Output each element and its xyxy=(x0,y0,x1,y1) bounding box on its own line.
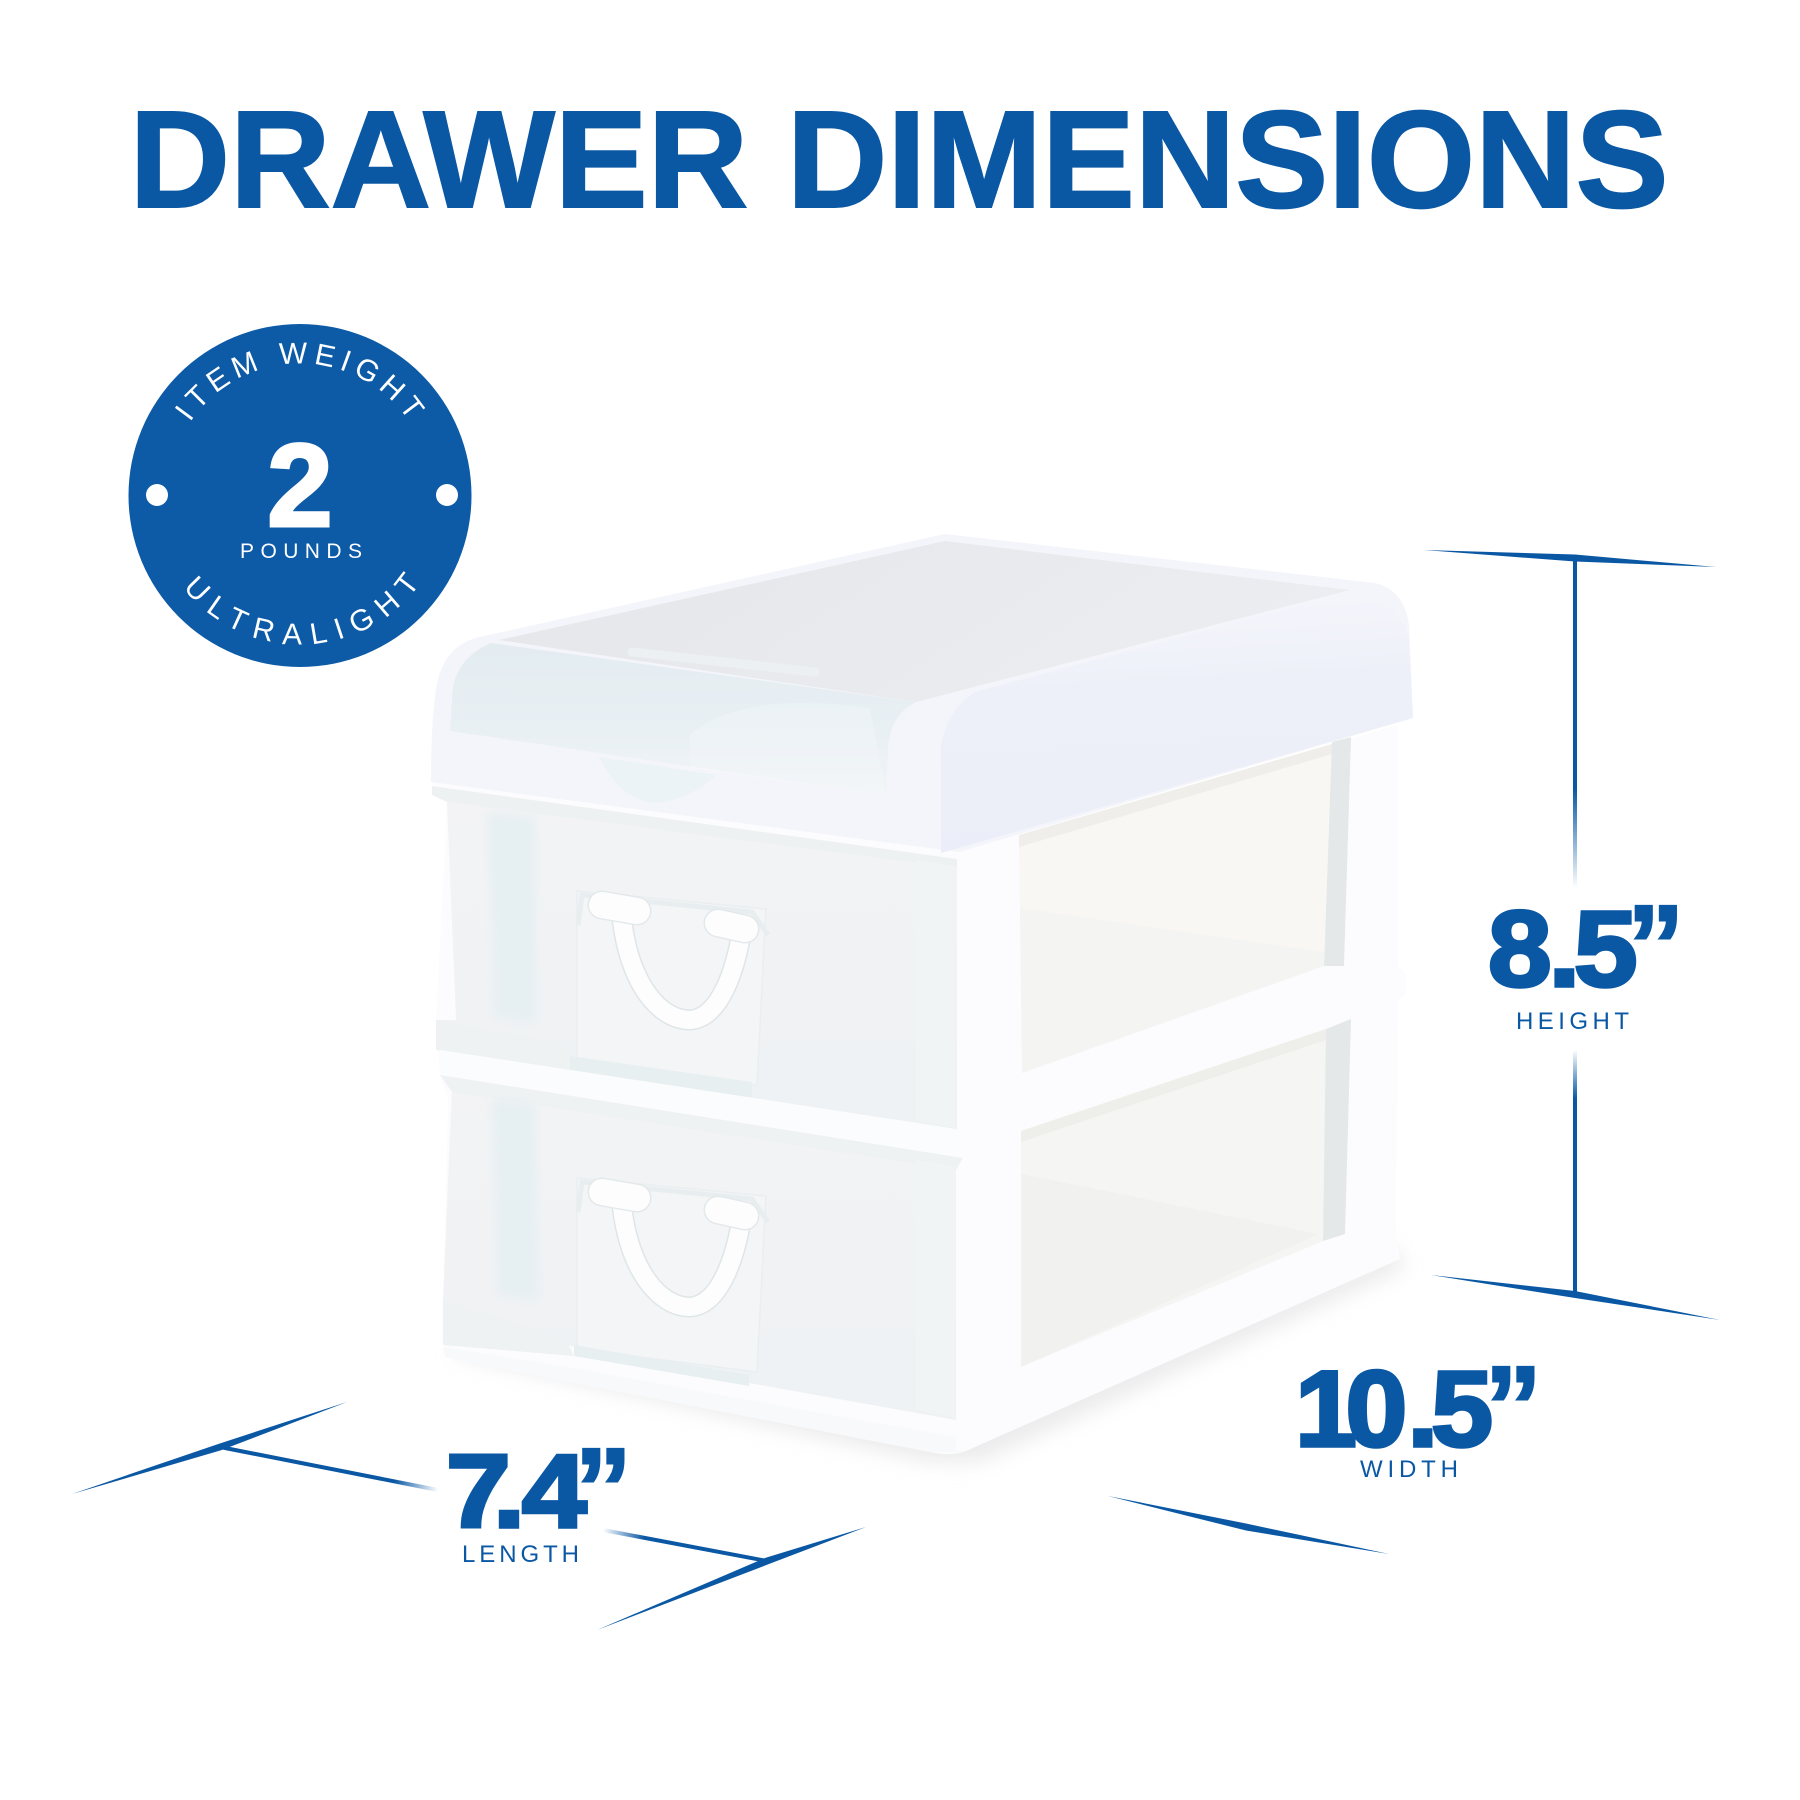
left peg outline xyxy=(602,1192,637,1198)
title: DRAWER DIMENSIONS xyxy=(130,83,1668,237)
lower window inner pillar xyxy=(1323,1019,1351,1241)
length right arm xyxy=(603,1530,767,1561)
upper drawer floor strip xyxy=(570,1056,752,1098)
length value: 7.4 xyxy=(446,1434,587,1550)
product: two-drawer storage unit xyxy=(431,534,1413,1462)
upper drawer right strip xyxy=(916,860,955,1128)
right peg xyxy=(718,923,745,929)
lid right face xyxy=(941,592,1413,853)
handle u-bar xyxy=(622,1207,741,1307)
badge arc text: item weight: ITEM WEIGHT xyxy=(175,342,426,420)
upper side window xyxy=(1019,737,1351,1073)
badge unit: POUNDS xyxy=(240,540,362,563)
badge right dot xyxy=(436,484,458,506)
handle plate xyxy=(577,1178,766,1372)
upper window inner pillar xyxy=(1324,737,1351,966)
height upper line xyxy=(1573,558,1577,888)
upper drawer front xyxy=(436,802,957,1130)
upper drawer rim xyxy=(432,786,957,868)
right peg outline xyxy=(718,923,745,929)
lower window floor xyxy=(1021,1174,1319,1367)
lower drawer handle xyxy=(577,1178,768,1372)
width value: 10.5 xyxy=(1295,1349,1493,1470)
length left arm xyxy=(220,1447,438,1490)
lower drawer front xyxy=(443,1088,956,1420)
height value: 8.5 xyxy=(1488,888,1638,1009)
lower drawer streak xyxy=(492,1098,538,1300)
upper window floor xyxy=(1020,908,1324,1073)
height bottom tick xyxy=(1431,1275,1720,1320)
length left tick xyxy=(72,1402,347,1494)
height dimension xyxy=(1424,550,1720,1320)
top plane xyxy=(499,541,1350,702)
width dimension xyxy=(1108,1343,1542,1554)
lower drawer rim xyxy=(440,1075,963,1170)
badge number: 2 xyxy=(267,420,333,552)
height inch mark: ” xyxy=(1627,882,1684,1010)
upper drawer handle xyxy=(577,891,768,1085)
badge: item weight xyxy=(128,324,472,667)
lower drawer bottom rim xyxy=(443,1300,574,1356)
handle u-bar xyxy=(622,920,741,1020)
width label: WIDTH xyxy=(1360,1456,1458,1483)
left peg xyxy=(602,905,637,911)
length right tick xyxy=(597,1527,866,1630)
lid embossed label xyxy=(632,652,815,672)
badge left dot xyxy=(146,484,168,506)
dome inner curve xyxy=(690,703,886,795)
upper drawer streak xyxy=(488,812,535,1022)
length dimension xyxy=(72,1402,866,1630)
height lower line xyxy=(1573,1050,1577,1294)
lower drawer right strip xyxy=(916,1160,955,1418)
height label: HEIGHT xyxy=(1516,1008,1629,1035)
length inch mark: ” xyxy=(574,1425,632,1553)
upper drawer xyxy=(432,786,957,1130)
right peg outline xyxy=(718,1210,745,1216)
base strip xyxy=(443,1347,956,1452)
lower drawer floor strip xyxy=(574,1345,749,1386)
upper drawer bottom rim xyxy=(436,1020,570,1072)
lid translucent dome xyxy=(450,643,916,795)
handle bracket xyxy=(578,895,768,935)
width tick xyxy=(1108,1496,1389,1554)
length label: LENGTH xyxy=(462,1541,579,1568)
left peg outline xyxy=(602,905,637,911)
body frame xyxy=(431,725,1406,1454)
handle u-bar outline xyxy=(622,920,741,1020)
height top tick xyxy=(1424,550,1716,567)
handle bracket xyxy=(578,1182,768,1222)
lower side window xyxy=(1021,1019,1351,1367)
upper window lip xyxy=(1019,744,1332,847)
handle u-bar outline xyxy=(622,1207,741,1307)
lower window lip xyxy=(1021,1029,1326,1142)
badge arc text: ultralight: ULTRALIGHT xyxy=(187,571,416,644)
lid finger notch xyxy=(599,757,716,803)
middle band xyxy=(440,1050,963,1158)
width inch mark: ” xyxy=(1484,1343,1542,1471)
lid silhouette xyxy=(431,534,1413,852)
floor shadow xyxy=(455,1245,1405,1462)
lower drawer xyxy=(440,1075,963,1420)
left peg xyxy=(602,1192,637,1198)
handle plate xyxy=(577,891,766,1085)
right peg xyxy=(718,1210,745,1216)
